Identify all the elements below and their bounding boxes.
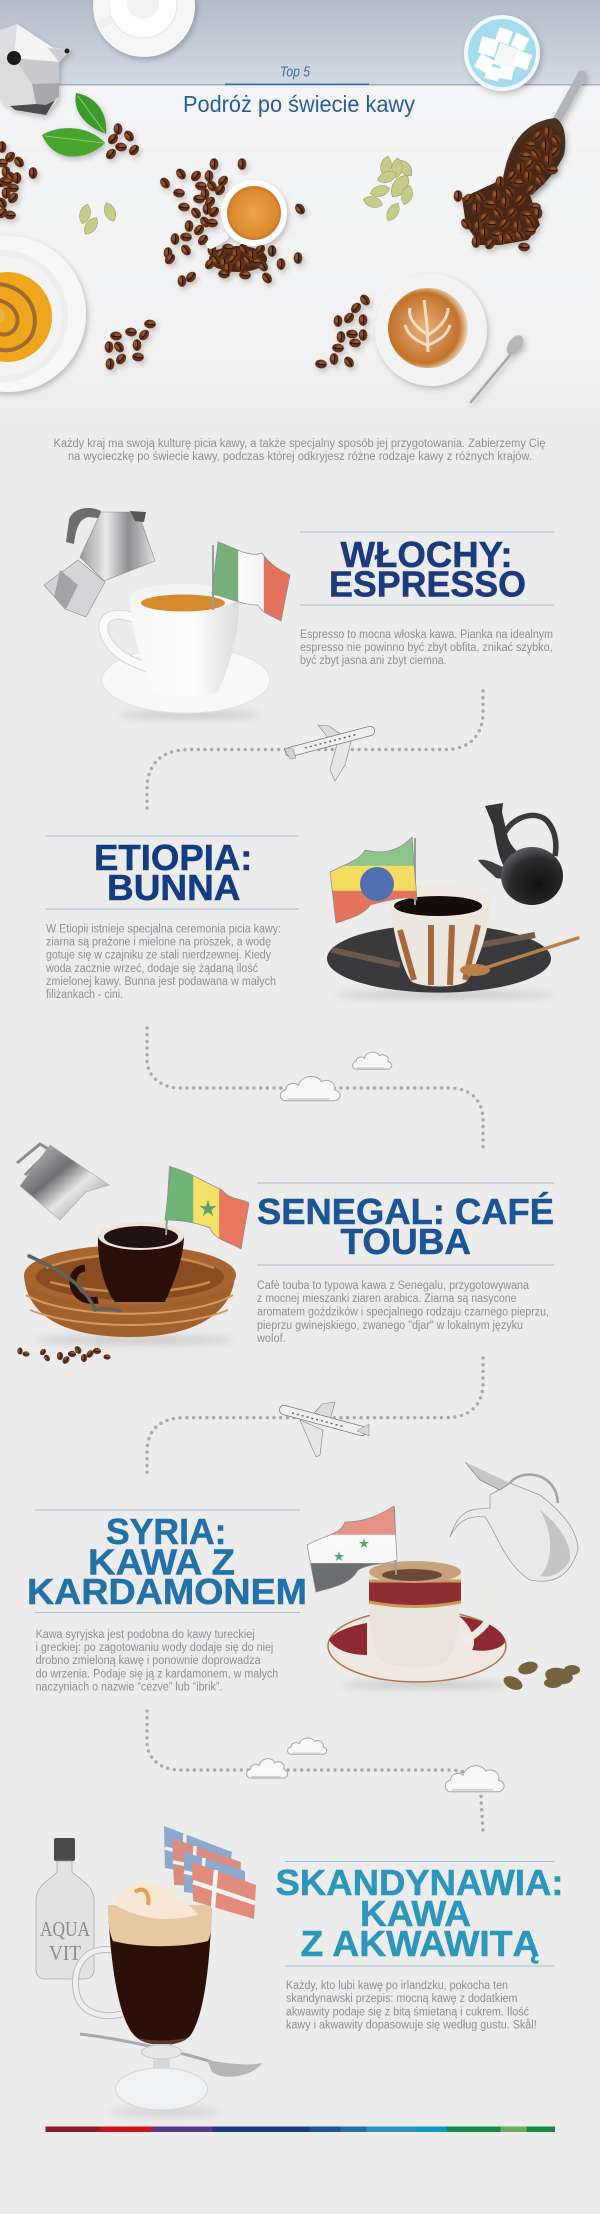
heading: Senegal bbox=[257, 1191, 554, 1262]
body text: z mocnej mieszanki ziaren arabica. Ziarna są nasycone bbox=[257, 1293, 516, 1305]
rule bbox=[46, 908, 299, 910]
body text: espresso nie powinno być zbyt obfita, znikać szybko, bbox=[300, 642, 553, 654]
sugar cubes bbox=[474, 27, 532, 82]
illustration: decorated cup, pot, flag, cardamom bbox=[307, 1462, 580, 1693]
body text: naczyniach o nazwie “cezve” lub “ibrik”. bbox=[36, 1682, 222, 1694]
Senegal flag: ★ bbox=[199, 1199, 217, 1219]
rule bbox=[257, 1182, 554, 1184]
icon: cloud small bbox=[353, 1052, 392, 1069]
body text bbox=[45, 924, 281, 1001]
rule bbox=[285, 1965, 554, 1967]
icon: cloud left bbox=[247, 1759, 288, 1778]
heading: Włochy: WŁOCHY: bbox=[340, 534, 512, 575]
body text: woda zacznie wrzeć, dodaje się żądaną ilość bbox=[45, 963, 258, 975]
cup body bbox=[130, 597, 239, 696]
body text: gotuje się w czajniku ze stali nierdzewnej. Kiedy bbox=[46, 950, 271, 962]
dotted route 1 bbox=[147, 691, 483, 810]
dark mug bbox=[73, 1222, 184, 1302]
icon: airplane 2 bbox=[284, 1402, 369, 1457]
heading: Włochy bbox=[329, 534, 526, 604]
glass of coffee bbox=[108, 1880, 212, 2045]
Senegal flag bbox=[165, 1166, 249, 1249]
aquavit bottle: VIT bbox=[49, 1941, 81, 1965]
stars on flag: ★ bbox=[358, 1538, 370, 1550]
dotted route 4 bbox=[147, 1711, 483, 1831]
panel: Włochy bbox=[44, 508, 554, 719]
rule bbox=[300, 604, 554, 606]
intro text: Każdy kraj ma swoją kulturę picia kawy, a także specjalny sposób jej przygotowania. Zabierzemy Cię bbox=[54, 438, 546, 450]
heading: Senegal: TOUBA bbox=[340, 1221, 471, 1262]
rule bbox=[35, 1509, 300, 1511]
illustration: bunna cup, plate, jebena pot, flag bbox=[327, 803, 578, 999]
Ethiopian flag bbox=[330, 837, 417, 923]
stars on flag bbox=[334, 1538, 370, 1563]
body text: skandynawski przepis: mocną kawę z dodatkiem bbox=[286, 1993, 518, 2005]
body text: zmielonej kawy. Bunna jest podawana w małych bbox=[46, 976, 276, 988]
saucer bbox=[102, 647, 270, 713]
body text: Espresso to mocna włoska kawa. Pianka na idealnym bbox=[300, 629, 553, 641]
intro text bbox=[54, 438, 546, 463]
glass foot bbox=[116, 2044, 208, 2110]
metal scoop with beans bbox=[503, 75, 582, 195]
rule bbox=[35, 1612, 300, 1614]
beans, lower right bbox=[315, 293, 372, 369]
Italian flag bbox=[212, 542, 290, 621]
header: table-top photo scene bbox=[0, 0, 600, 430]
aquavit bottle: AQUA bbox=[40, 1917, 91, 1941]
wooden table surface bbox=[0, 85, 600, 430]
coffee beans, left edge bbox=[0, 141, 37, 220]
body text bbox=[256, 1280, 549, 1345]
teaspoon bbox=[471, 332, 527, 402]
silver pot bbox=[450, 1462, 578, 1581]
rule bbox=[300, 531, 554, 533]
body text: Każdy, kto lubi kawę po irlandzku, pokocha ten bbox=[286, 1980, 508, 1992]
body text bbox=[300, 629, 553, 667]
footer colour bar bbox=[46, 2126, 555, 2132]
dotted route 2 bbox=[147, 1028, 483, 1148]
heading: Etiopia bbox=[94, 837, 252, 908]
sugar bowl bbox=[464, 15, 540, 91]
icon: cloud top bbox=[288, 1738, 327, 1754]
spilled beans bbox=[17, 1345, 111, 1365]
copper spoon bbox=[460, 938, 578, 976]
spoon bbox=[29, 1256, 120, 1311]
body text: Cafè touba to typowa kawa z Senegalu, przygotowywana bbox=[257, 1280, 530, 1292]
body text bbox=[36, 1629, 278, 1694]
scattered beans around espresso bbox=[158, 158, 307, 287]
illustration: espresso cup with moka pot and Italian flag bbox=[44, 508, 290, 719]
bean pile from scoop bbox=[454, 126, 563, 252]
title: Top 5: Top 5 bbox=[280, 64, 311, 80]
body text: ziarna są prażone i mielone na proszek, a wodę bbox=[46, 937, 271, 949]
heading: Włochy: ESPRESSO bbox=[329, 564, 526, 604]
body text: Kawa syryjska jest podobna do kawy tureckiej bbox=[36, 1629, 255, 1641]
icon: cloud right bbox=[445, 1766, 504, 1792]
heading: Skandynawia: KAWA bbox=[360, 1893, 471, 1934]
rule bbox=[257, 1264, 554, 1266]
body text: aromatem goździków i specjalnego rodzaju czarnego pieprzu, bbox=[257, 1306, 549, 1318]
dotted route 3 bbox=[147, 1358, 483, 1478]
body text: kawy i akwawity dopasowuje się według gustu. Skål! bbox=[286, 2020, 537, 2032]
espresso surface bbox=[141, 594, 225, 612]
glass handle bbox=[75, 1949, 122, 2016]
heading: Syria bbox=[27, 1511, 307, 1612]
wicker basket bbox=[24, 1245, 236, 1337]
Syrian flag bbox=[307, 1506, 397, 1592]
heading: Etiopia: BUNNA bbox=[107, 867, 240, 908]
cup handle bbox=[455, 1583, 493, 1646]
panel: Syria bbox=[27, 1462, 580, 1694]
illustration: glass of coffee, aquavit bottle, flags, spoon bbox=[36, 1826, 262, 2116]
coffee beans near leaves bbox=[104, 123, 141, 161]
body text: akwawity podaje się z bitą śmietaną i cukrem. Ilość bbox=[286, 2006, 529, 2018]
body text: być zbyt jasna ani zbyt ciemna. bbox=[300, 655, 447, 667]
heading: Syria: KAWA Z bbox=[88, 1542, 235, 1582]
heading: Skandynawia bbox=[276, 1862, 564, 1964]
body text: W Etiopii istnieje specjalna ceremonia picia kawy: bbox=[46, 924, 281, 936]
title underline bbox=[225, 84, 369, 85]
body text: filiżankach - cini. bbox=[46, 989, 123, 1001]
heading: Etiopia: ETIOPIA: bbox=[94, 837, 252, 878]
cardamom pods, left bbox=[77, 201, 118, 237]
jebena pot bbox=[478, 803, 563, 905]
spoon bbox=[80, 2034, 262, 2077]
panel: Skandynawia bbox=[36, 1826, 564, 2116]
heading: Syria: SYRIA: bbox=[106, 1511, 226, 1552]
milk jug bbox=[17, 1144, 109, 1220]
pastry swirl bbox=[0, 272, 52, 362]
dark plate bbox=[327, 925, 551, 993]
illustration: mug in basket, milk jug, flag bbox=[17, 1144, 249, 1365]
moka pot sketch bbox=[44, 508, 155, 617]
rule bbox=[285, 1860, 554, 1862]
body text: pieprzu gwinejskiego, zwanego "djar" w lokalnym języku bbox=[257, 1320, 523, 1332]
beans, lower left bbox=[105, 319, 156, 370]
heading: Skandynawia: SKANDYNAWIA: bbox=[276, 1862, 564, 1903]
body text: do wrzenia. Podaje się ją z kardamonem, w małych bbox=[36, 1668, 278, 1680]
panel: Etiopia bbox=[45, 803, 578, 1001]
main title: Podróż po świecie kawy bbox=[183, 91, 415, 117]
Nordic flags bbox=[164, 1826, 256, 1919]
stars on flag: ★ bbox=[334, 1551, 344, 1563]
heading: Senegal: SENEGAL: CAFÉ bbox=[257, 1191, 554, 1232]
body text: drobno zmieloną kawę i ponownie doprowadza bbox=[36, 1655, 261, 1667]
white cup and saucer, top bbox=[93, 0, 195, 57]
patterned cup bbox=[388, 885, 492, 986]
body text: wolof. bbox=[256, 1333, 286, 1345]
grey-blue tablecloth band bbox=[0, 0, 600, 86]
espresso cup, top view bbox=[205, 180, 287, 250]
latte cup with saucer bbox=[375, 274, 487, 386]
icon: airplane 1 bbox=[284, 725, 370, 781]
body text bbox=[286, 1980, 537, 2032]
coffee leaves bbox=[42, 93, 106, 157]
saucer bbox=[328, 1610, 506, 1682]
moka pot, top left bbox=[0, 24, 71, 115]
cup handle bbox=[103, 615, 148, 668]
cardamom pods, right bbox=[362, 155, 415, 223]
panel: Senegal bbox=[17, 1144, 554, 1365]
intro text: na wycieczkę po świecie kawy, podczas której odkryjesz różne rodzaje kawy z różnych krajów. bbox=[68, 451, 532, 463]
plate with pastry bbox=[0, 236, 86, 392]
aquavit bottle bbox=[36, 1838, 94, 1979]
heading: Syria: KARDAMONEM bbox=[27, 1571, 307, 1612]
icon: cloud bbox=[280, 1076, 340, 1101]
rule bbox=[46, 835, 299, 837]
heading: Skandynawia: Z AKWAWITĄ bbox=[300, 1923, 540, 1964]
cardamom spices bbox=[501, 1660, 580, 1693]
porcelain cup bbox=[369, 1561, 461, 1668]
body text: i greckiej: po zagotowaniu wody dodaje się do niej bbox=[36, 1642, 273, 1654]
